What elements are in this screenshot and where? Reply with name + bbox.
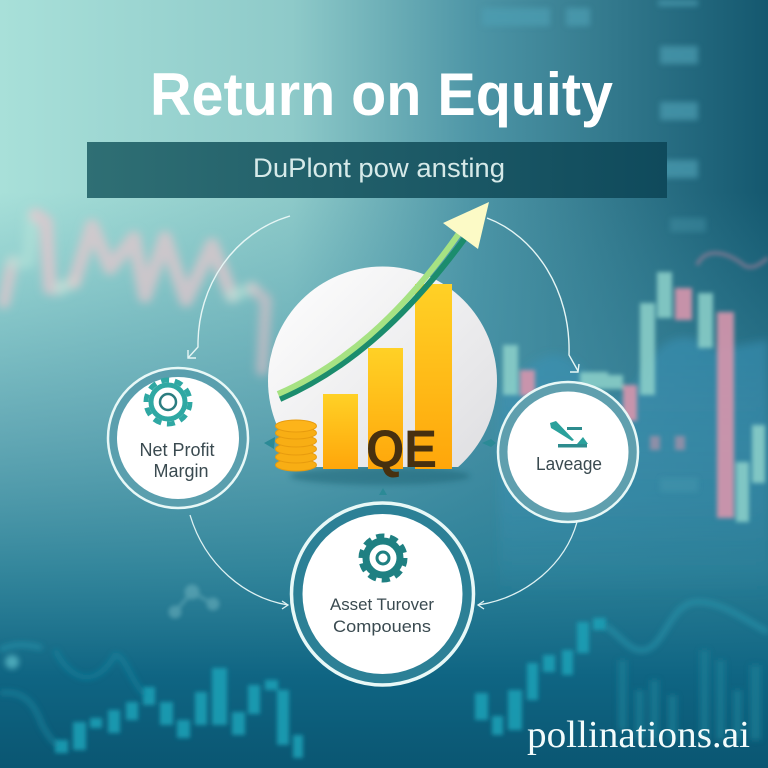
panel: asset turnover components [292, 503, 474, 685]
small teal pointers [264, 437, 496, 495]
panel: net profit margin [108, 368, 248, 508]
connector arrow: top to leverage [487, 218, 579, 372]
icon: lever [550, 421, 588, 448]
icon: gear [362, 536, 404, 580]
panel: leverage [498, 382, 638, 522]
panel: net profit margin: Margin [153, 461, 209, 481]
icon: coin stack [276, 420, 316, 471]
label: Asset Turover [330, 595, 434, 614]
connector arrow: top to margin [188, 216, 290, 358]
white globe backdrop [268, 266, 497, 467]
subtitle banner [87, 142, 667, 198]
central ROE graphic [268, 202, 497, 496]
subtitle banner: DuPlont pow ansting [253, 153, 505, 183]
central shadow [290, 467, 470, 485]
label: Laveage [536, 454, 602, 474]
growth arrow [278, 202, 489, 399]
blurred background chart: right area [500, 338, 768, 600]
watermark: pollinations.ai [527, 714, 750, 756]
title: Return on Equity [150, 61, 614, 128]
QE label: QE [366, 420, 437, 479]
bar chart [323, 284, 452, 469]
connector arrow: margin to asset turnover [190, 515, 288, 609]
connector arrow: leverage to asset turnover [478, 522, 577, 609]
blurred background chart: upper left line [4, 215, 266, 370]
faint network glyph [170, 586, 218, 617]
blurred background chart: right candlesticks [503, 253, 768, 522]
blurred background wave lines [0, 602, 768, 745]
blurred background chart: bottom candlesticks [55, 618, 606, 758]
label: Net Profit [139, 440, 215, 460]
icon: gear [146, 380, 190, 424]
panel: asset turnover components: Compouens [333, 617, 431, 636]
blurred background labels top right [482, 0, 706, 492]
